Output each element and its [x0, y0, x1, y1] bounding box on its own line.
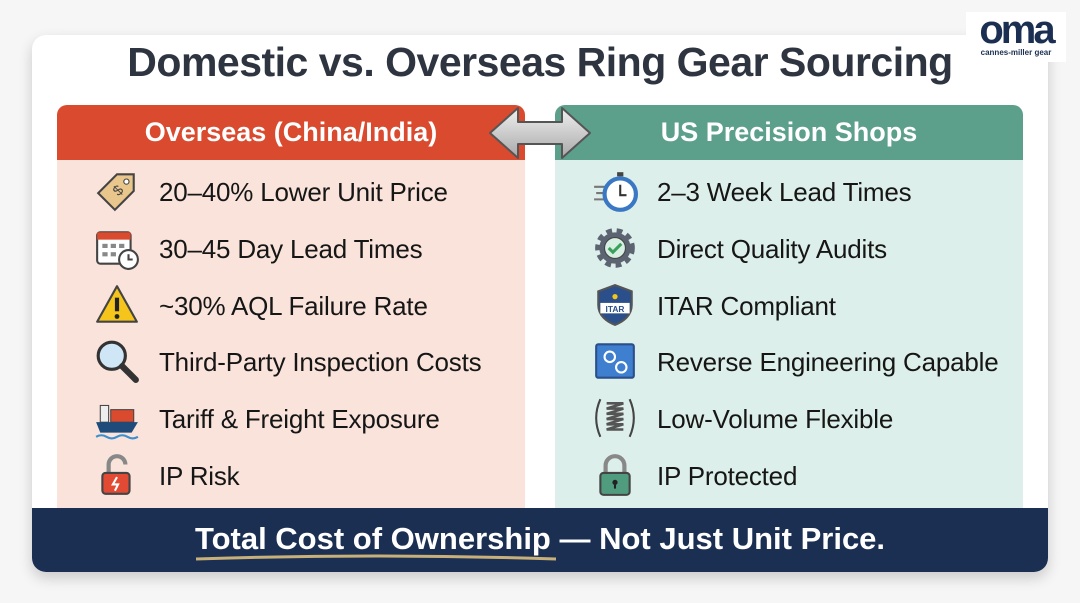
item: 2-3 week [594, 172, 911, 212]
item: AQL: ~30% AQL Failure Rate [159, 291, 428, 321]
item: ITAR: ITAR [606, 304, 624, 314]
item: tariff: Tariff & Freight Exposure [159, 404, 440, 434]
panel: US [555, 105, 1023, 508]
item: price: $ [110, 183, 127, 200]
item: reverse engineering: Reverse Engineering Capable [657, 347, 998, 377]
item: tariff [96, 404, 440, 440]
bottom banner [32, 508, 1048, 572]
logo [966, 12, 1066, 62]
item: IP protected [599, 454, 797, 496]
item: low volume [595, 398, 893, 438]
item: inspection: Third-Party Inspection Costs [159, 347, 481, 377]
item: ITAR: ITAR Compliant [657, 291, 836, 321]
item: IP protected: IP Protected [657, 461, 797, 491]
item: audits: Direct Quality Audits [657, 234, 887, 264]
item: ITAR [597, 284, 836, 326]
item: price [96, 173, 448, 212]
item: IP risk: IP Risk [159, 461, 239, 491]
item: price: 20–40% Lower Unit Price [159, 177, 448, 207]
item: audits [595, 228, 887, 268]
header: US: US Precision Shops [661, 117, 917, 147]
arrow: double [489, 107, 591, 159]
header: overseas [57, 105, 525, 160]
title: Domestic vs. Overseas Ring Gear Sourcing [127, 39, 953, 85]
bottom banner: Total Cost of Ownership — Not Just Unit Price. [195, 521, 885, 556]
logo: oma [979, 8, 1053, 52]
item: low volume: Low-Volume Flexible [657, 404, 893, 434]
item: lead times: 30–45 Day Lead Times [159, 234, 422, 264]
item: 2-3 week: 2–3 Week Lead Times [657, 177, 911, 207]
header: overseas: Overseas (China/India) [145, 117, 437, 147]
item: inspection [96, 340, 481, 383]
panel: overseas [57, 105, 525, 508]
item: lead times [96, 231, 422, 270]
header: US [555, 105, 1023, 160]
logo: cannes-miller gear [981, 48, 1051, 57]
item: IP risk [101, 454, 240, 495]
item: AQL [96, 285, 428, 323]
